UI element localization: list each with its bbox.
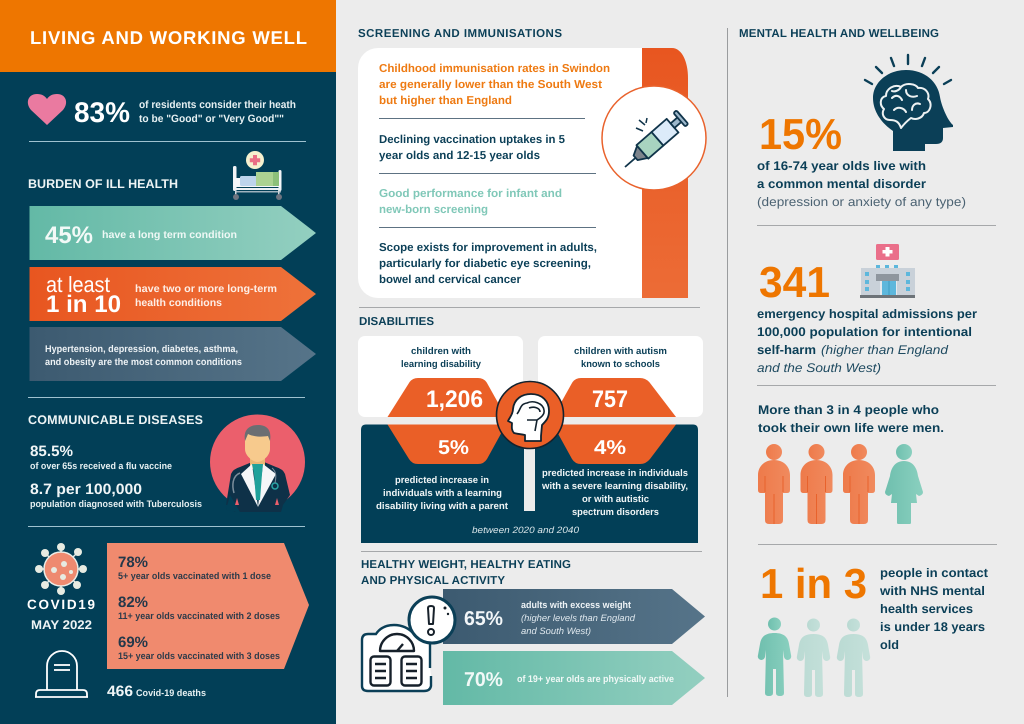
- stat: 341: 100,000 population for intentional: [757, 325, 972, 339]
- hexagon: 5%: [388, 424, 506, 464]
- text: declining uptakes: year olds and 12-15 year olds: [379, 150, 540, 162]
- stat: 341: [757, 259, 977, 375]
- icon: doctor: [210, 414, 305, 512]
- arrow: at least 1 in 10: at least: [46, 272, 110, 297]
- stat: flu vaccine: 85.5%: [30, 443, 73, 460]
- panel: predicted increase: disability living with a parent: [376, 501, 509, 512]
- arrow: 45% long term condition: have a long term condition: [102, 229, 237, 241]
- pictogram: 1 in 3 people: [758, 618, 870, 697]
- panel: predicted increase: between 2020 and 2040: [472, 525, 580, 535]
- arrow: most common conditions: [30, 327, 316, 381]
- label: covid19 may 2022: COVID19: [27, 597, 95, 612]
- panel: predicted increase: [361, 424, 698, 543]
- arrow: at least 1 in 10: health conditions: [135, 297, 222, 309]
- icon: man 3: [843, 444, 875, 524]
- panel: predicted increase: with a severe learning disability,: [541, 481, 688, 492]
- hexagon: 5%: 5%: [438, 437, 469, 459]
- stat: covid deaths: 466: [107, 683, 133, 700]
- stat: 83% good health: of residents consider their heath: [139, 99, 296, 111]
- arrow: 65% excess weight: adults with excess weight: [521, 600, 632, 611]
- title banner: LIVING AND WORKING WELL: [30, 27, 307, 48]
- stat: 1 in 3: health services: [880, 602, 973, 616]
- heading: healthy weight: HEALTHY WEIGHT, HEALTHY EATING: [361, 559, 571, 571]
- text: scope for improvement: Scope exists for improvement in adults,: [379, 242, 597, 254]
- arrow: covid vaccination rates: 78%: [118, 554, 148, 571]
- text: declining uptakes: [379, 134, 566, 162]
- hexagon: 4%: 4%: [594, 437, 626, 459]
- icon: person light 2: [837, 618, 870, 697]
- stat: 341: (higher than England: [821, 343, 949, 357]
- text: scope for improvement: bowel and cervical cancer: [379, 274, 522, 286]
- stat: 15%: a common mental disorder: [757, 177, 926, 191]
- stat: 83% good health: to be "Good" or "Very Good"": [139, 113, 284, 125]
- arrow: 70% physically active: 70%: [464, 669, 503, 691]
- icon: man 2: [800, 444, 832, 524]
- stat: 15%: 15%: [759, 111, 842, 159]
- label: covid19 may 2022: [27, 597, 95, 632]
- stat: covid deaths: [107, 683, 206, 700]
- text: scope for improvement: [379, 242, 597, 286]
- panel: healthy weight: [361, 559, 705, 705]
- title banner: [0, 0, 336, 72]
- label: covid19 may 2022: MAY 2022: [31, 618, 92, 632]
- stat: 1 in 3: with NHS mental: [879, 584, 985, 598]
- stat: 1 in 3: [760, 560, 989, 652]
- heading: screening and immunisations: SCREENING AND IMMUNISATIONS: [358, 28, 562, 40]
- icon: hospital: [860, 244, 915, 298]
- arrow: 65% excess weight: and South West): [521, 626, 591, 636]
- panel: left sidebar: [0, 0, 336, 724]
- icon: person dark: [758, 618, 791, 696]
- hexagon: 1,206: [388, 378, 506, 417]
- stat: flu vaccine: of over 65s received a flu vaccine: [30, 461, 172, 472]
- panel: predicted increase: spectrum disorders: [572, 507, 659, 518]
- icon: person light 1: [797, 618, 830, 697]
- text: 3 in 4 men: More than 3 in 4 people who: [758, 403, 939, 417]
- text: immunisation rates: Childhood immunisation rates in Swindon: [379, 63, 610, 75]
- hexagon: 1,206: 1,206: [426, 386, 483, 413]
- text: good performance: [379, 188, 562, 216]
- arrow: at least 1 in 10: have two or more long-term: [135, 283, 277, 295]
- arrow: covid vaccination rates: 5+ year olds vaccinated with 1 dose: [118, 571, 271, 582]
- icon: woman: [885, 444, 923, 524]
- text: declining uptakes: Declining vaccination uptakes in 5: [379, 134, 566, 146]
- panel: predicted increase: or with autistic: [582, 494, 650, 505]
- stat: tuberculosis: population diagnosed with Tuberculosis: [30, 499, 202, 510]
- icon: syringe: [602, 86, 706, 190]
- stat: covid deaths: Covid-19 deaths: [136, 688, 206, 699]
- icon: head with brain and rays: [865, 55, 953, 151]
- stat: 341: 341: [759, 259, 830, 307]
- panel: mental health and wellbeing: [739, 28, 997, 697]
- heading: mental health: MENTAL HEALTH AND WELLBEING: [739, 28, 939, 40]
- text: immunisation rates: but higher than England: [379, 95, 512, 107]
- text: 3 in 4 men: [758, 403, 944, 435]
- arrow: 70% physically active: of 19+ year olds are physically active: [517, 674, 674, 685]
- arrow: 45% long term condition: [30, 206, 316, 260]
- stat: 15%: [757, 111, 966, 209]
- stat: 83% good health: [28, 94, 296, 129]
- card: autism: known to schools: [581, 359, 660, 370]
- card: autism: [538, 336, 703, 417]
- card: autism: children with autism: [574, 346, 667, 357]
- stat: 1 in 3: old: [880, 638, 899, 652]
- panel: disabilities: [358, 316, 703, 543]
- stat: 1 in 3: 1 in 3: [760, 560, 867, 607]
- arrow: 65% excess weight: (higher levels than England: [521, 613, 636, 623]
- icon: scales: [362, 597, 455, 691]
- stat: 1 in 3: people in contact: [880, 566, 989, 580]
- panel: predicted increase: predicted increase in: [395, 475, 489, 486]
- arrow: 45% long term condition: 45%: [45, 222, 93, 249]
- stat: 341: self-harm: [757, 343, 816, 357]
- hexagon: 757: 757: [592, 386, 628, 413]
- icon: heart: [28, 94, 66, 125]
- arrow: at least 1 in 10: 1 in 10: [46, 291, 121, 318]
- heading: communicable diseases: COMMUNICABLE DISEASES: [28, 413, 203, 427]
- panel: predicted increase: predicted increase in individuals: [542, 468, 688, 479]
- arrow: covid vaccination rates: [107, 543, 309, 669]
- stat: tuberculosis: 8.7 per 100,000: [30, 481, 142, 498]
- arrow: 65% excess weight: [443, 589, 705, 644]
- arrow: 70% physically active: [443, 651, 705, 705]
- text: good performance: new-born screening: [379, 204, 488, 216]
- stat: tuberculosis: [30, 481, 202, 510]
- pictogram: 3 men 1 woman: [758, 444, 923, 524]
- arrow: covid vaccination rates: 82%: [118, 594, 148, 611]
- text: 3 in 4 men: took their own life were men.: [758, 421, 944, 435]
- heading: healthy weight: AND PHYSICAL ACTIVITY: [361, 575, 505, 587]
- hexagon: 757: [553, 378, 676, 417]
- stat: 341: and the South West): [757, 361, 881, 375]
- panel: predicted increase: individuals with a learning: [383, 488, 502, 499]
- icon: head with brain: [496, 382, 564, 448]
- stat: 15%: of 16-74 year olds live with: [757, 159, 926, 173]
- icon: hospital bed: [233, 151, 282, 200]
- icon: man 1: [758, 444, 790, 524]
- card: learning disability: [358, 336, 523, 417]
- stat: 83% good health: 83%: [74, 97, 130, 129]
- arrow: covid vaccination rates: 15+ year olds vaccinated with 3 doses: [118, 651, 280, 662]
- text: scope for improvement: particularly for diabetic eye screening,: [379, 258, 591, 270]
- text: good performance: Good performance for infant and: [379, 188, 562, 200]
- icon: gravestone: [35, 651, 88, 697]
- stat: flu vaccine: [30, 443, 172, 472]
- icon: covid virus: [35, 543, 87, 595]
- arrow: at least 1 in 10: [30, 267, 316, 321]
- heading: disabilities: DISABILITIES: [359, 316, 434, 328]
- stat: 341: emergency hospital admissions per: [757, 307, 977, 321]
- panel: screening and immunisations: [358, 28, 706, 298]
- hexagon: 4%: [553, 424, 676, 464]
- arrow: covid vaccination rates: 69%: [118, 634, 148, 651]
- arrow: most common conditions: and obesity are the most common conditions: [45, 357, 242, 368]
- text: immunisation rates: [379, 63, 610, 107]
- stat: 1 in 3: is under 18 years: [880, 620, 985, 634]
- stat: 15%: (depression or anxiety of any type): [757, 195, 966, 209]
- heading: burden of ill health: BURDEN OF ILL HEALTH: [28, 177, 178, 191]
- arrow: covid vaccination rates: 11+ year olds vaccinated with 2 doses: [118, 611, 280, 622]
- card: learning disability: children with: [411, 346, 471, 357]
- text: immunisation rates: are generally lower than the South West: [379, 79, 602, 91]
- arrow: 65% excess weight: 65%: [464, 608, 503, 630]
- card: learning disability: learning disability: [401, 359, 482, 370]
- heading: healthy weight: [361, 559, 571, 587]
- arrow: most common conditions: Hypertension, depression, diabetes, asthma,: [45, 344, 238, 355]
